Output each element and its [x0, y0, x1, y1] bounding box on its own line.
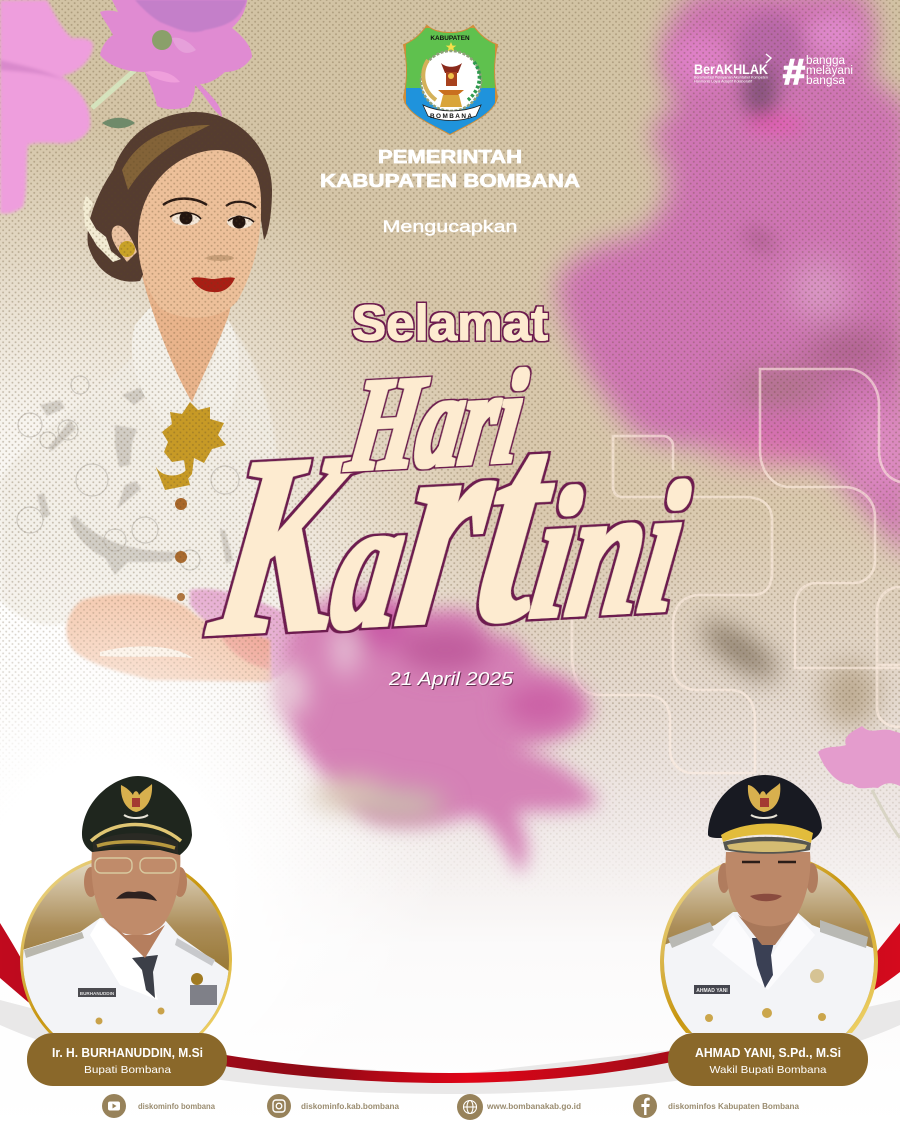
logo: bangga melayani bangsa: bangsa [806, 75, 846, 87]
blurred stem shadows lower right [693, 611, 878, 729]
grey arc under ribbon [0, 1000, 900, 1094]
name plate: Bupati [27, 1033, 227, 1086]
name plate: Wakil Bupati: AHMAD YANI, S.Pd., M.Si [695, 1046, 841, 1060]
hair [88, 112, 272, 282]
face [92, 850, 180, 935]
white uniform [664, 912, 874, 1033]
blurred pink flower centre [274, 593, 598, 875]
logo: bangga melayani bangsa: bangga [806, 55, 846, 67]
white uniform [23, 918, 228, 1033]
hands [66, 594, 272, 682]
pink sleeve [190, 589, 303, 680]
neck [108, 922, 165, 958]
logo: BerAKHLAK: Berorientasi Pelayanan Akuntabel Kompeten [694, 76, 768, 80]
face [726, 852, 810, 927]
logo: bangga melayani bangsa [783, 53, 853, 92]
large blurred pink flower top right [558, 0, 900, 560]
white fade over the lower illustration [0, 540, 450, 1126]
title: Selamat: Selamat [352, 295, 548, 351]
government crest [404, 26, 497, 138]
logo: BerAKHLAK: Harmonis Loyal Adaptif Kolaboratif [694, 80, 752, 84]
name plate: Wakil Bupati [668, 1033, 868, 1086]
heading: government name: KABUPATEN BOMBANA [320, 171, 580, 191]
officer cap [82, 776, 192, 855]
logo: BerAKHLAK: BerAKHLAK [694, 62, 768, 77]
social links row [102, 1094, 800, 1120]
moustache [116, 891, 157, 901]
officer cap [708, 775, 822, 854]
crisp pink flower top centre-left [100, 0, 252, 117]
lips [191, 277, 235, 292]
logo: bangga melayani bangsa: melayani [806, 65, 853, 77]
eyes and mouth [742, 862, 796, 901]
eyes and brows [163, 199, 256, 261]
icon: website [457, 1094, 483, 1120]
crest label top: KABUPATEN [430, 35, 470, 42]
right top logos [694, 53, 853, 92]
illustration: R.A. Kartini [0, 112, 303, 682]
label: website: www.bombanakab.go.id [486, 1102, 581, 1111]
name plate: Bupati: Bupati Bombana [84, 1064, 171, 1076]
halftone dot texture [0, 0, 900, 872]
logo: BerAKHLAK [694, 54, 771, 84]
crest star [446, 42, 456, 52]
icon: youtube [102, 1094, 126, 1118]
ears [718, 863, 818, 893]
gold ring and disc [20, 854, 232, 1033]
red ribbon [0, 923, 900, 1083]
glasses [95, 858, 176, 873]
neck [738, 915, 797, 945]
logo: bangga melayani bangsa: # [783, 53, 805, 92]
portrait: Bupati [20, 776, 232, 1033]
icon: instagram [267, 1094, 291, 1118]
crest emblem [421, 51, 481, 111]
neck and chest [142, 270, 232, 402]
heading: government name: PEMERINTAH [378, 147, 522, 167]
gold ring and disc [660, 853, 878, 1033]
label: instagram: diskominfo.kab.bombana [301, 1102, 400, 1111]
icon: facebook [633, 1094, 657, 1118]
sub heading: Mengucapkan: Mengucapkan [382, 217, 518, 236]
white uniform: BURHANUDDIN [80, 991, 115, 996]
title: Hari: Hari [340, 342, 534, 499]
hair ornament [83, 195, 121, 262]
portrait: Wakil Bupati [660, 775, 878, 1033]
kebaya blouse with lace [0, 305, 279, 625]
label: facebook: diskominfos Kabupaten Bombana [668, 1102, 800, 1111]
ear and earring [112, 225, 137, 262]
title: Kartini: Kartini [195, 350, 712, 698]
white uniform: AHMAD YANI [696, 988, 728, 994]
crest ribbon [423, 105, 481, 120]
flower stem and leaf [92, 70, 135, 128]
face [138, 150, 261, 318]
small pink flower right [818, 726, 900, 838]
ears [84, 867, 187, 897]
label: youtube: diskominfo bombana [138, 1102, 216, 1111]
crisp pink flower top left [0, 0, 93, 214]
decorative rounded outline shapes [572, 369, 900, 773]
date: 21 April 2025 [388, 669, 514, 689]
name plate: Bupati: Ir. H. BURHANUDDIN, M.Si [52, 1046, 203, 1060]
gold brooch [155, 402, 226, 601]
government crest: BOMBANA [430, 113, 472, 120]
name plate: Wakil Bupati: Wakil Bupati Bombana [710, 1064, 827, 1076]
heading: government name [320, 147, 580, 191]
